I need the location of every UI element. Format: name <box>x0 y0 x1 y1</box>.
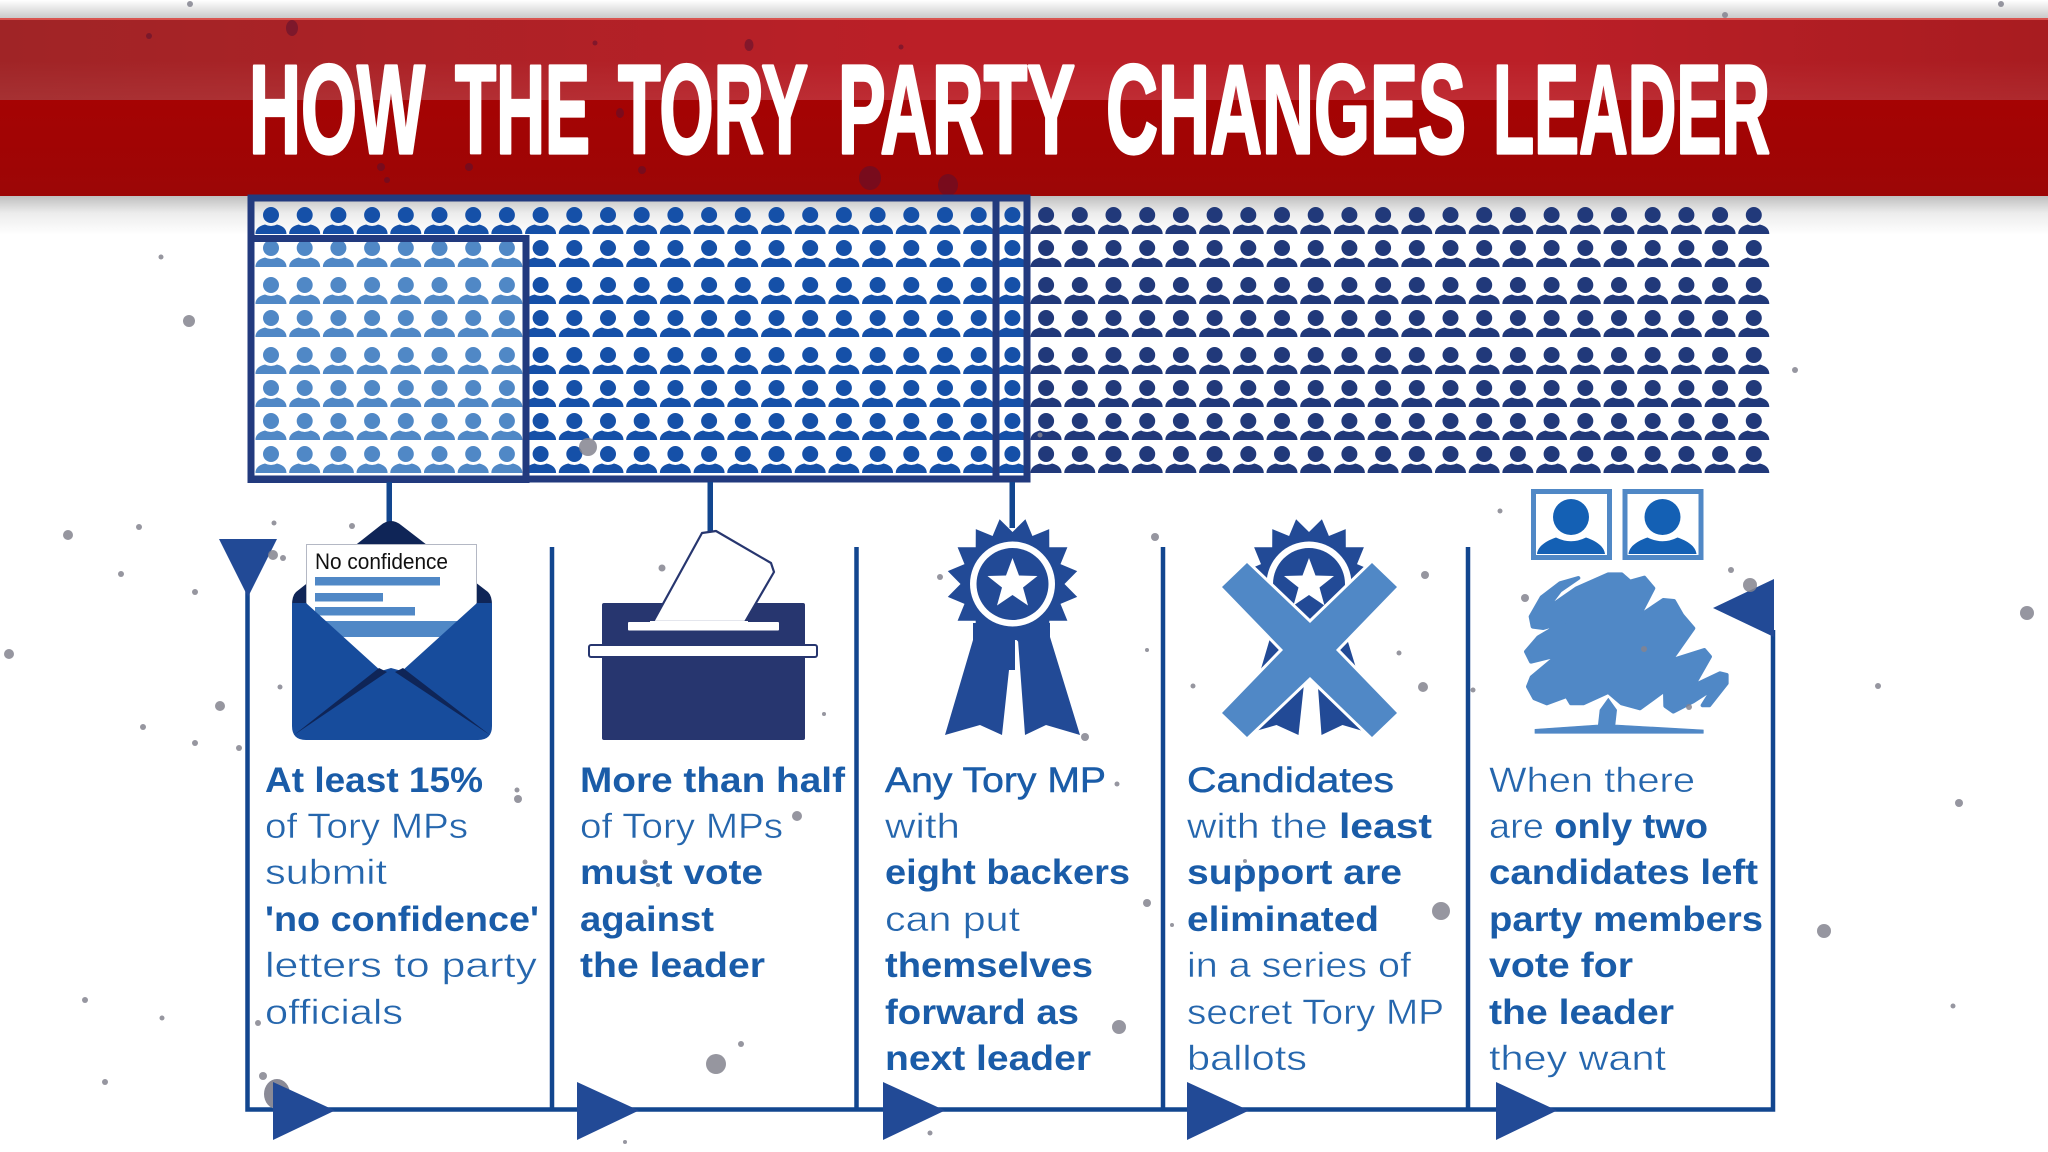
text: step 5 <box>1489 761 1763 1078</box>
title: HOW <box>249 39 425 180</box>
letter text: No confidence <box>315 549 448 574</box>
candidate one <box>1534 492 1610 558</box>
text: step 4: eliminated <box>1187 900 1379 939</box>
text: step 4 <box>1186 761 1444 1078</box>
text: step 5: vote for <box>1489 946 1633 985</box>
text: step 5: they want <box>1489 1039 1666 1078</box>
text: step 2: of Tory MPs <box>580 807 783 846</box>
text: step 4: ballots <box>1187 1039 1307 1078</box>
text: step 5: When there <box>1489 761 1695 800</box>
connector lines <box>386 482 1015 532</box>
text: step 2 <box>580 761 845 985</box>
title <box>249 39 1770 180</box>
text: step 1: officials <box>265 993 403 1032</box>
title: PARTY <box>838 39 1075 180</box>
timeline frame <box>248 547 1773 1110</box>
text: step 1: of Tory MPs <box>265 807 468 846</box>
text: step 1: 'no confidence' <box>265 900 539 939</box>
text: step 2: must vote <box>580 853 763 892</box>
text: step 1: submit <box>265 853 387 892</box>
text: step 1 <box>265 761 539 1032</box>
highlight boxes on the grid <box>251 198 1027 480</box>
text: step 5: party members <box>1489 900 1763 939</box>
title: LEADER <box>1493 39 1770 180</box>
speck behind first arrow <box>264 1079 290 1109</box>
text: step 2: against <box>580 900 714 939</box>
icon: ballot box <box>589 531 817 740</box>
MPs sending letters: light blue block <box>256 240 522 473</box>
text: step 3: forward as <box>885 993 1079 1032</box>
text: step 4: in a series of <box>1187 946 1411 985</box>
remaining MPs: navy block <box>1031 207 1769 473</box>
text: step 4: with the least <box>1186 807 1432 846</box>
MPs voting against: mid blue block <box>256 207 1028 473</box>
text: step 4: secret Tory MP <box>1187 993 1444 1032</box>
text: step 3: with <box>884 807 960 846</box>
text: step 3 <box>884 761 1130 1078</box>
text: step 5: the leader <box>1489 993 1674 1032</box>
banner specks <box>146 20 958 196</box>
icon: crossed out rosette <box>1222 519 1397 737</box>
grid of MP icons <box>256 207 1769 473</box>
text: step 1: At least 15% <box>265 761 483 800</box>
arrows along the bottom <box>273 1082 1557 1140</box>
text: step 4: support are <box>1187 853 1402 892</box>
text: step 2: More than half <box>580 761 845 800</box>
title: THE <box>455 39 590 180</box>
arrow: top right <box>1713 579 1774 637</box>
text: step 2: the leader <box>580 946 765 985</box>
text: step 5: are only two <box>1489 807 1708 846</box>
icon: rosette <box>945 519 1080 735</box>
red title banner <box>0 18 2048 196</box>
text: step 3: can put <box>885 900 1020 939</box>
icon: two candidate portraits <box>1534 492 1701 558</box>
text: step 3: themselves <box>885 946 1093 985</box>
text: step 5: candidates left <box>1489 853 1758 892</box>
icon: conservative tree <box>1526 574 1727 733</box>
title: CHANGES <box>1106 39 1466 180</box>
text: step 3: next leader <box>885 1039 1091 1078</box>
text: step 4: Candidates <box>1187 761 1394 800</box>
text: step 3: eight backers <box>885 853 1130 892</box>
text: step 3: Any Tory MP <box>885 761 1106 800</box>
text: step 1: letters to party <box>265 946 538 985</box>
icon: envelope with no confidence letter <box>292 521 492 740</box>
arrow: start down <box>219 539 277 597</box>
candidate two <box>1625 492 1701 558</box>
title: TORY <box>618 39 808 180</box>
